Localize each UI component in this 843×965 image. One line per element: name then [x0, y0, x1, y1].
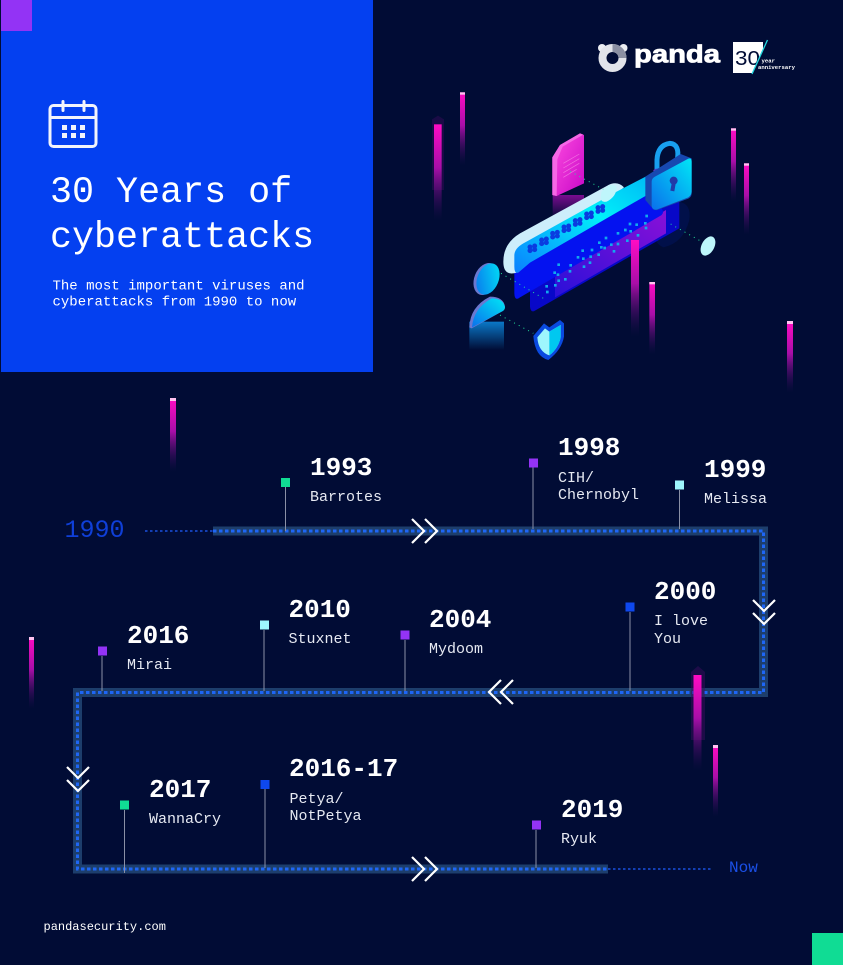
subtitle: cyberattacks from 1990 to now	[52, 294, 297, 310]
password bar	[503, 174, 650, 274]
icon: user	[469, 259, 505, 350]
logo: 30 year anniversary	[733, 40, 796, 74]
logo: 30 year anniversary: anniversary	[758, 64, 796, 71]
glow disc behind lock	[655, 202, 690, 247]
footer url: pandasecurity.com	[44, 920, 166, 934]
event: 2017 WannaCry: 2017	[149, 775, 211, 805]
event: 2016-17 Petya/NotPetya: 2016-17	[289, 754, 398, 784]
icon: padlock	[645, 143, 692, 210]
event: 1998 CIH/Chernobyl: CIH/	[558, 470, 594, 487]
event: 2000 I love You: You	[654, 631, 681, 648]
corner square: purple	[1, 0, 32, 31]
event: 2019 Ryuk: 2019	[561, 795, 623, 825]
logo: panda: panda	[634, 40, 721, 68]
event: 2010 Stuxnet: 2010	[288, 595, 351, 625]
event: 2016-17 Petya/NotPetya: Petya/	[290, 791, 344, 808]
password dots	[527, 204, 605, 253]
data dots	[545, 215, 648, 293]
event: 1998 CIH/Chernobyl: Chernobyl	[558, 487, 639, 504]
event: 2000 I love You	[626, 577, 716, 691]
front card: blue	[514, 192, 663, 299]
illustration: password security	[432, 92, 749, 360]
corner square: green	[812, 933, 843, 965]
event: 2004 Mydoom: Mydoom	[429, 641, 483, 658]
event: 2016 Mirai: Mirai	[127, 657, 172, 674]
icon: shield	[533, 320, 564, 360]
event: 2016 Mirai: 2016	[127, 621, 189, 651]
event: 2016-17 Petya/NotPetya: NotPetya	[290, 808, 362, 825]
logo: panda	[598, 40, 721, 68]
subtitle: The most important viruses and	[52, 278, 305, 294]
event: 2019 Ryuk: Ryuk	[561, 831, 597, 848]
event: 2004 Mydoom	[400, 605, 491, 691]
rear card: purple	[530, 190, 679, 311]
arrows: timeline direction	[67, 519, 775, 881]
event: 1999 Melissa: 1999	[704, 455, 766, 485]
logo: 30 year anniversary: 30	[735, 48, 760, 70]
event: 2019 Ryuk	[532, 795, 623, 868]
pillars: front	[631, 240, 655, 355]
event: 2004 Mydoom: 2004	[429, 605, 491, 635]
pillars: behind	[432, 92, 749, 235]
panel: title	[1, 0, 373, 372]
heading line 2: cyberattacks	[50, 217, 314, 259]
connector lines	[491, 171, 702, 333]
event: 2000 I love You: 2000	[654, 577, 716, 607]
event: 1999 Melissa	[675, 455, 767, 529]
event: 2016 Mirai	[98, 621, 189, 691]
decorative pillars	[29, 321, 793, 817]
event: 2000 I love You: I love	[654, 613, 708, 630]
label: Now: Now	[729, 859, 758, 877]
event: 2016-17 Petya/NotPetya	[260, 754, 398, 868]
logo: 30 year anniversary: year	[762, 58, 775, 64]
icon: document	[552, 133, 584, 218]
event: 1993 Barrotes	[281, 453, 382, 531]
icon: ellipse node right	[698, 234, 718, 258]
event: 1993 Barrotes: 1993	[310, 453, 372, 483]
event: 1999 Melissa: Melissa	[704, 491, 767, 508]
icon: calendar	[50, 102, 96, 146]
event: 1998 CIH/Chernobyl	[529, 433, 639, 529]
event: 2010 Stuxnet: Stuxnet	[288, 631, 352, 648]
timeline path	[78, 531, 764, 869]
event: 2017 WannaCry: WannaCry	[149, 811, 221, 828]
event: 2010 Stuxnet	[260, 595, 352, 691]
event: 1993 Barrotes: Barrotes	[310, 489, 382, 506]
event: 1998 CIH/Chernobyl: 1998	[558, 433, 620, 463]
label: 1990: 1990	[64, 516, 125, 545]
event: 2017 WannaCry	[120, 775, 221, 873]
heading: 30 Years of	[50, 172, 292, 214]
